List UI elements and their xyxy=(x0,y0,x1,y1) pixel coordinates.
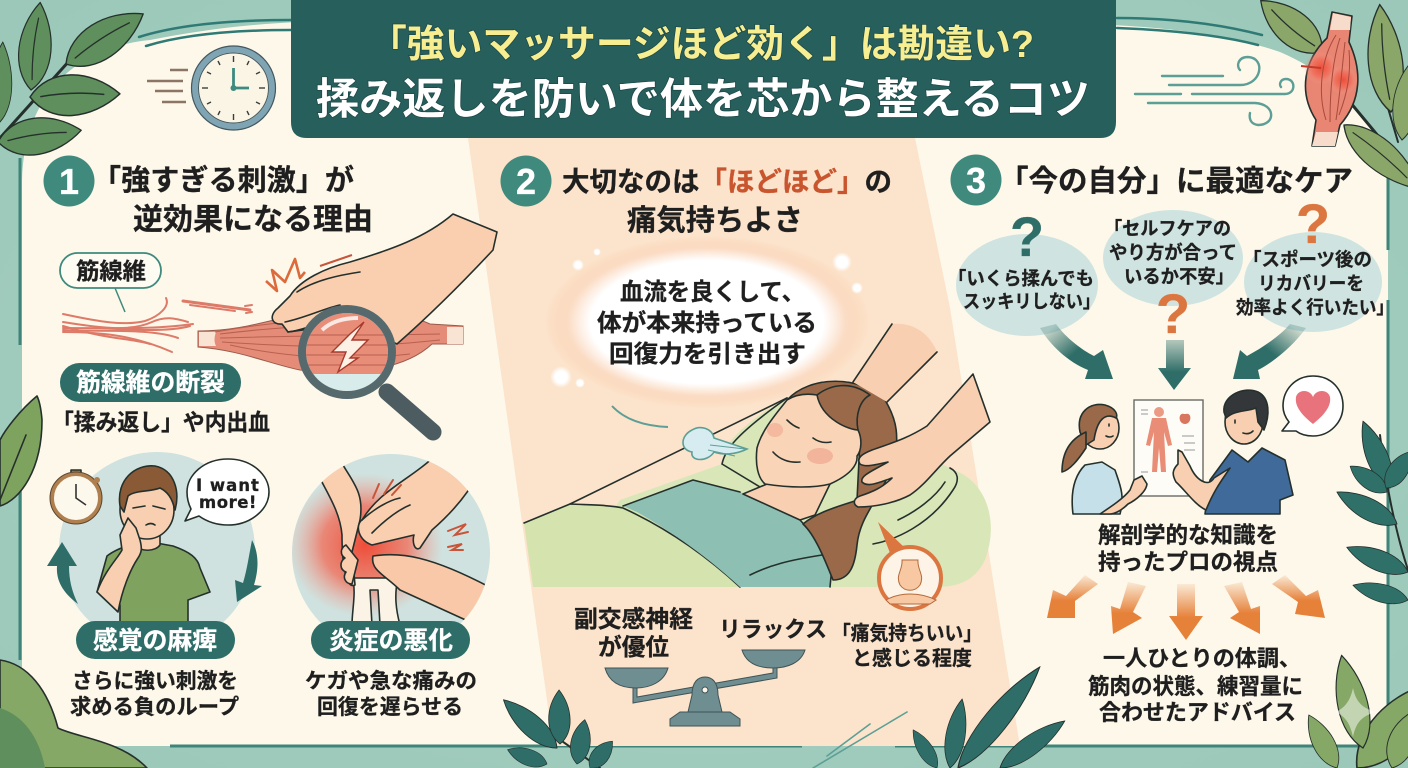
icon: muscle top right xyxy=(1301,12,1358,146)
muscle xyxy=(198,310,463,372)
text: parasympathetic: 副交感神経 xyxy=(574,606,694,632)
label: muscle fibre: 筋線維 xyxy=(76,258,146,284)
loop arrow left xyxy=(47,542,78,604)
icon: top-left leaves xyxy=(0,0,153,160)
illustration: sensory numbness xyxy=(47,452,269,719)
shirt xyxy=(623,480,833,587)
icon: bottom-left foliage xyxy=(0,660,147,768)
illustration: inflammation xyxy=(287,454,495,719)
face xyxy=(756,394,861,487)
bubble: right worry: 効率よく行いたい」 xyxy=(1236,297,1394,318)
bubble: centre worry: いるか不安」 xyxy=(1124,266,1234,287)
text: pleasant pain xyxy=(832,622,982,670)
section 2 heading xyxy=(562,166,892,237)
text: pro perspective xyxy=(1098,523,1278,575)
bubble: centre worry xyxy=(1103,210,1243,345)
pain marks xyxy=(373,480,468,550)
icon: left-side leaf xyxy=(0,396,42,506)
text: pleasant pain: と感じる程度 xyxy=(852,646,972,670)
arrows: professional to advice xyxy=(1047,575,1325,640)
text: numbness: さらに強い刺激を xyxy=(72,670,238,693)
hair front xyxy=(817,386,870,430)
text: relax: リラックス xyxy=(719,617,827,642)
breath cloud xyxy=(683,428,747,460)
neck xyxy=(743,484,830,520)
impact mark xyxy=(266,259,305,291)
bubble: right worry: 「スポーツ後の xyxy=(1243,249,1372,270)
bubble: right worry: リカバリーを xyxy=(1258,273,1364,294)
section 1 number xyxy=(44,156,94,206)
section 1 heading xyxy=(92,163,373,236)
bubble: left worry: 「いくら揉んでも xyxy=(948,268,1094,289)
speech bubble: I want xyxy=(196,476,260,495)
title line 2: 揉み返しを防いで体を芯から整えるコツ xyxy=(316,76,1090,124)
therapist arm xyxy=(853,324,937,402)
section 3 heading: 「今の自分」に最適なケア xyxy=(999,165,1353,198)
callout: recovery glow: 体が本来持っている xyxy=(597,309,817,337)
text: parasympathetic: が優位 xyxy=(598,633,669,660)
hand pressing xyxy=(272,214,497,344)
title line 1: 「強いマッサージほど効く」は勘違い? xyxy=(369,24,1034,66)
text: tailored advice: 一人ひとりの体調、 xyxy=(1103,646,1301,671)
panel: peach centre xyxy=(468,138,1020,746)
label: fibre rupture: 筋線維の断裂 xyxy=(76,369,225,397)
text: pro perspective: 解剖学的な知識を xyxy=(1098,523,1278,548)
speech bubble: more! xyxy=(199,493,257,512)
illustration: relaxed massage xyxy=(524,324,991,609)
text: inflammation: 回復を遅らせる xyxy=(317,696,463,719)
bubble: left worry: スッキリしない」 xyxy=(963,291,1100,312)
stopwatch xyxy=(50,470,102,524)
sparkle watermark xyxy=(1336,688,1376,737)
text: numbness: 求める負のループ xyxy=(70,696,239,719)
bubble: centre worry: ? xyxy=(1156,282,1190,345)
callout: recovery glow: 血流を良くして、 xyxy=(620,279,805,306)
icon: wind xyxy=(1135,57,1293,125)
callout: recovery glow xyxy=(545,236,869,408)
section 1 heading: 「強すぎる刺激」が xyxy=(92,163,354,197)
loop arrow right xyxy=(235,540,262,602)
label: inflammation: 炎症の悪化 xyxy=(329,627,453,655)
icon: bottom-mid leaves xyxy=(813,659,1070,768)
label: inflammation xyxy=(311,621,470,659)
therapist xyxy=(1173,390,1293,514)
hair xyxy=(787,381,897,580)
panel: section 3 xyxy=(948,154,1394,725)
panel: section 1 xyxy=(44,156,497,719)
text: pleasant pain: 「痛気持ちいい」 xyxy=(832,622,982,645)
blanket xyxy=(524,504,740,587)
nurse xyxy=(1062,404,1147,514)
section 3 number xyxy=(950,154,1002,206)
text: rebound soreness: 「揉み返し」や内出血 xyxy=(52,409,270,435)
text: parasympathetic xyxy=(574,606,694,660)
label: numbness xyxy=(76,621,235,659)
boy xyxy=(97,466,210,622)
section 2 heading: 大切なのは「ほどほど」の xyxy=(562,166,892,197)
text: pro perspective: 持ったプロの視点 xyxy=(1098,550,1278,575)
speech bubble xyxy=(185,459,269,525)
heart bubble xyxy=(1282,376,1343,436)
icon: bottom-centre leaves xyxy=(496,690,619,768)
therapist hand xyxy=(854,374,990,507)
panel: section 2 xyxy=(500,156,991,726)
text: numbness xyxy=(70,670,239,719)
bubble: centre worry: やり方が合って xyxy=(1109,242,1237,263)
bubble: right worry: ? xyxy=(1296,192,1330,255)
label: muscle fibre xyxy=(60,253,161,312)
text: inflammation: ケガや急な痛みの xyxy=(305,670,477,693)
label: fibre rupture xyxy=(60,363,241,402)
sparkles xyxy=(550,248,863,388)
icon: magnifier xyxy=(300,309,433,432)
arrows: worries to professional xyxy=(1040,324,1306,390)
title banner xyxy=(291,0,1116,138)
text: tailored advice xyxy=(1088,646,1303,725)
section 3 number: 3 xyxy=(966,160,986,201)
icon: top-right leaves xyxy=(1250,0,1408,201)
icon: balance scale xyxy=(605,650,805,726)
text: inflammation xyxy=(305,670,477,719)
section 2 heading: 痛気持ちよさ xyxy=(627,204,803,237)
bubble: left worry: ? xyxy=(1010,205,1044,268)
text: tailored advice: 合わせたアドバイス xyxy=(1099,700,1296,725)
callout: pressure point xyxy=(878,522,941,609)
callout: recovery glow: 回復力を引き出す xyxy=(609,341,806,368)
label: numbness: 感覚の麻痺 xyxy=(93,627,217,655)
icon: bottom-right leaves xyxy=(1299,652,1408,768)
icon: right-side leaves xyxy=(1332,417,1408,609)
section 2 number: 2 xyxy=(516,161,536,202)
section 2 number xyxy=(500,156,552,206)
top arcs xyxy=(139,18,1262,46)
icon: clock xyxy=(147,46,276,130)
text: tailored advice: 筋肉の状態、練習量に xyxy=(1088,674,1303,699)
section 1 heading: 逆効果になる理由 xyxy=(133,204,373,236)
bubble: centre worry: 「セルフケアの xyxy=(1104,218,1231,239)
torn muscle fibres xyxy=(63,298,252,352)
panel frame xyxy=(20,158,1390,746)
bubble: right worry xyxy=(1236,192,1394,332)
section 1 number: 1 xyxy=(59,161,79,202)
illustration: consultation xyxy=(1062,376,1343,514)
bed and pillow xyxy=(560,398,991,587)
bubble: left worry xyxy=(948,205,1100,336)
anatomy chart xyxy=(1134,400,1203,496)
